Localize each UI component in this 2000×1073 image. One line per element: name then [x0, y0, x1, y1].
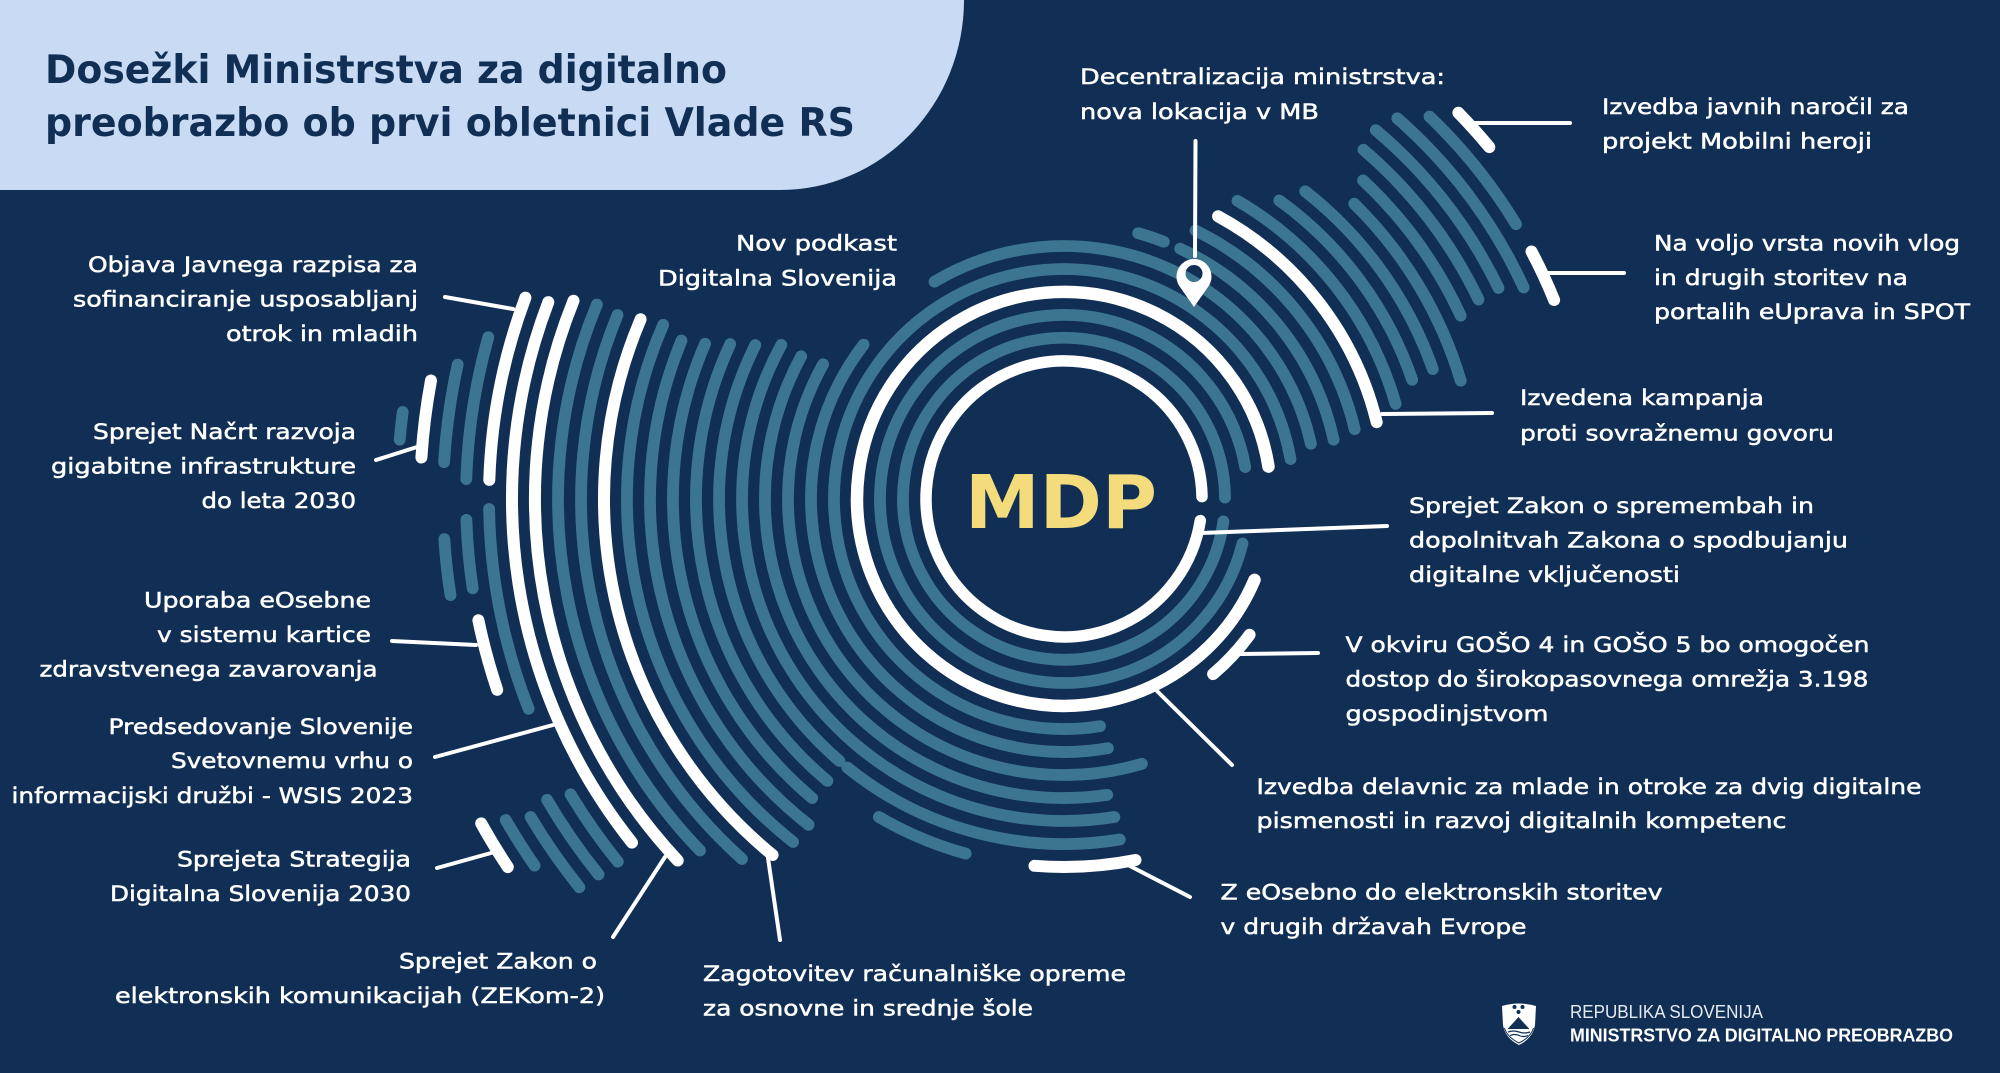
callout: Decentralizacija: nova lokacija v MB [1080, 100, 1319, 125]
callout: Javni razpis: Objava Javnega razpisa za [88, 253, 418, 278]
callout: eOsebna: v drugih državah Evrope [1220, 915, 1526, 940]
callout: delavnice [1157, 691, 1922, 834]
callout: eUprava in SPOT: portalih eUprava in SPOT [1654, 300, 1971, 325]
centre label MDP: MDP [965, 460, 1157, 546]
white highlighted arcs [421, 113, 1554, 867]
callout: kampanja: Izvedena kampanja [1520, 386, 1764, 411]
concentric arcs forming the map of Slovenia [400, 113, 1554, 887]
title: preobrazbo ob prvi obletnici Vlade RS [45, 101, 855, 146]
callout: GOŠO: V okviru GOŠO 4 in GOŠO 5 bo omogočen [1346, 632, 1870, 658]
callout: Zakon o digitalni vključenosti: Sprejet Zakon o spremembah in [1409, 494, 1814, 519]
callout: Strategija Digitalna Slovenija 2030: Sprejeta Strategija [177, 848, 411, 872]
callout: gigabitna infrastruktura: Sprejet Načrt razvoja [93, 420, 356, 445]
callout: Strategija Digitalna Slovenija 2030: Digitalna Slovenija 2030 [110, 882, 411, 907]
callout: računalniška oprema [703, 858, 1126, 1022]
callout: WSIS 2023: Predsedovanje Slovenije [108, 715, 413, 740]
callout: Decentralizacija [1080, 65, 1445, 125]
callout: eUprava in SPOT [1548, 232, 1971, 325]
callout: WSIS 2023: Svetovnemu vrhu o [171, 749, 413, 774]
callout: računalniška oprema: Zagotovitev računalniške opreme [703, 962, 1126, 987]
callout: Strategija Digitalna Slovenija 2030 [110, 848, 491, 907]
callout: gigabitna infrastruktura [51, 420, 417, 514]
callout: kampanja [1382, 386, 1834, 446]
callout: GOŠO: dostop do širokopasovnega omrežja 3.198 [1346, 668, 1868, 692]
callout: eOsebna v sistemu kartice: zdravstvenega zavarovanja [40, 658, 378, 682]
callout: ZEKom-2: Sprejet Zakon o [399, 950, 597, 974]
callout: Zakon o digitalni vključenosti: dopolnitvah Zakona o spodbujanju [1409, 528, 1848, 554]
callout: GOŠO [1240, 632, 1870, 727]
callout: eOsebna [1130, 866, 1663, 940]
title panel [0, 0, 964, 190]
footer logotype [1570, 1001, 1953, 1046]
callout: Zakon o digitalni vključenosti: digitalne vključenosti [1409, 563, 1680, 588]
callout: podkast: Nov podkast [736, 232, 897, 256]
callout: Javni razpis [73, 253, 513, 347]
callout: računalniška oprema: za osnovne in srednje šole [703, 996, 1033, 1022]
footer logotype: REPUBLIKA SLOVENIJA [1570, 1001, 1764, 1022]
callout: eOsebna v sistemu kartice [40, 588, 476, 682]
callout: eOsebna v sistemu kartice: Uporaba eOsebne [144, 588, 371, 614]
callout: eOsebna: Z eOsebno do elektronskih storitev [1220, 880, 1663, 906]
callout: Mobilni heroji: Izvedba javnih naročil za [1602, 95, 1909, 120]
callout: eUprava in SPOT: in drugih storitev na [1654, 266, 1908, 291]
icon: location pin with leader [1176, 141, 1212, 307]
teal arcs [400, 116, 1524, 887]
callout: delavnice: pismenosti in razvoj digitalnih kompetenc [1256, 809, 1786, 834]
callout: ZEKom-2: elektronskih komunikacijah (ZEKom-2) [115, 984, 605, 1009]
callout: podkast: Digitalna Slovenija [658, 266, 897, 292]
icon: Slovenian coat of arms [1502, 1004, 1536, 1045]
callout: gigabitna infrastruktura: do leta 2030 [202, 489, 356, 514]
callout: Decentralizacija: Decentralizacija ministrstva: [1080, 65, 1445, 90]
callout: eOsebna v sistemu kartice: v sistemu kartice [157, 623, 371, 648]
callout: Mobilni heroji: projekt Mobilni heroji [1602, 130, 1872, 154]
callout: eUprava in SPOT: Na voljo vrsta novih vlog [1654, 232, 1960, 256]
callout: ZEKom-2 [115, 857, 665, 1009]
callout: podkast [658, 232, 897, 292]
callout: delavnice: Izvedba delavnic za mlade in otroke za dvig digitalne [1256, 775, 1922, 800]
callout: WSIS 2023: informacijski družbi - WSIS 2023 [12, 784, 413, 809]
callout: GOŠO: gospodinjstvom [1346, 702, 1548, 727]
footer logotype: MINISTRSTVO ZA DIGITALNO PREOBRAZBO [1570, 1024, 1953, 1046]
callout: WSIS 2023 [12, 715, 553, 809]
callout: kampanja: proti sovražnemu govoru [1520, 422, 1834, 446]
callout: Javni razpis: otrok in mladih [226, 322, 418, 347]
title: Dosežki Ministrstva za digitalno [45, 48, 727, 93]
callout: gigabitna infrastruktura: gigabitne infrastrukture [51, 454, 356, 480]
callout: Javni razpis: sofinanciranje usposabljanj [73, 288, 418, 312]
title [45, 48, 855, 146]
callout: Mobilni heroji [1473, 95, 1909, 154]
callout: Zakon o digitalni vključenosti [1201, 494, 1848, 588]
